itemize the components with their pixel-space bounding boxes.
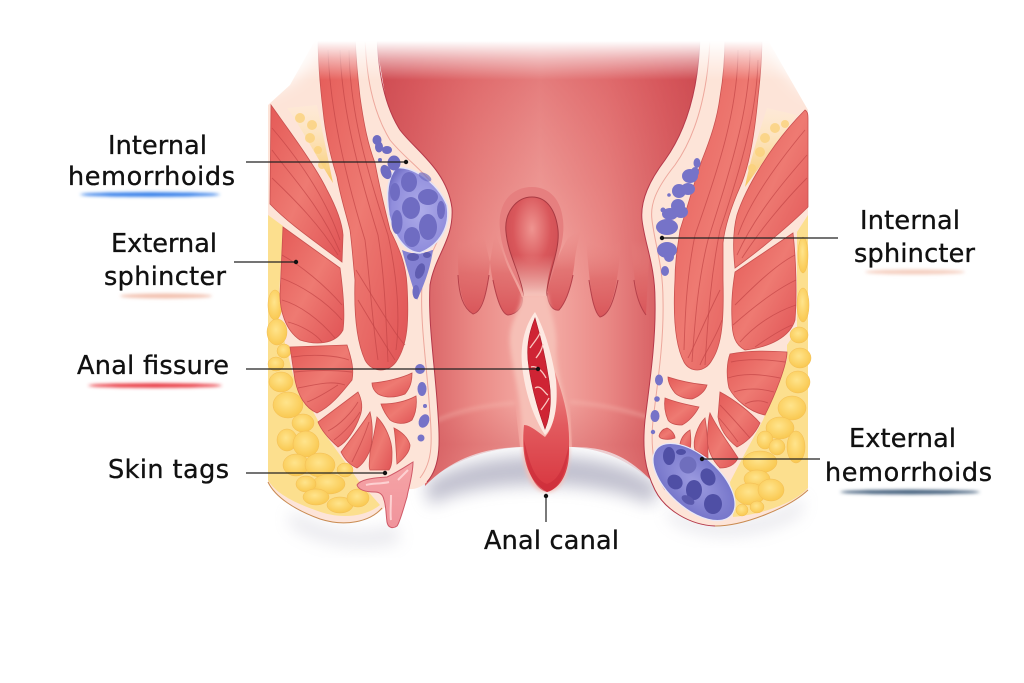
muscle: upper outer right [734,110,808,268]
muscle: fourth right [718,392,760,447]
muscle: sixth left [369,417,392,470]
label: internal hemorrhoids [68,131,408,197]
label: internal sphincter: Internal [860,206,960,236]
muscle: right long internal sphincter [674,35,762,370]
label: internal hemorrhoids: hemorrhoids [68,162,235,192]
label: internal sphincter: sphincter [854,239,976,269]
panel: left fat tissue [267,105,380,516]
label: external sphincter: sphincter [104,262,227,292]
anal fissure [522,312,557,435]
icon: internal hemorrhoid mass [372,135,448,300]
label: external sphincter [104,229,298,298]
icon: right internal vein blobs [650,158,700,434]
label: external hemorrhoids: External [849,424,956,454]
panel: rectal dome and opening [500,187,563,296]
panel: right labels [660,206,992,494]
muscle: seventh left [394,428,410,464]
muscle: small lower inner left [381,396,416,423]
label: internal hemorrhoids: Internal [108,131,207,161]
panel: left tissue body [268,35,452,523]
icon: left lower vein blobs [415,364,431,442]
label: external sphincter: External [111,229,217,259]
soft fade of the upper outer tissue [240,10,840,100]
muscle: fourth left [318,392,362,447]
muscle: seventh right [680,430,691,449]
label: anal canal [484,494,619,556]
muscle: upper outer left [270,105,343,262]
label: anal fissure [77,351,540,388]
label: skin tags: Skin tags [108,455,229,485]
muscle: third left [290,345,353,413]
muscle: left long internal sphincter [318,35,408,370]
icon: skin tag [357,462,413,528]
drop shadow under the anatomy [290,455,805,547]
muscle: second left [280,227,344,343]
panel: right external sphincter muscles [659,110,808,468]
muscle: fifth left [341,412,372,468]
icon: external hemorrhoid [639,429,749,535]
anal canal [510,294,569,492]
muscle: second right [732,233,796,350]
label: anal canal: Anal canal [484,526,619,556]
panel: left external sphincter muscles [270,105,416,470]
top fade [250,20,830,80]
label: external hemorrhoids [700,424,992,494]
panel: left labels [68,131,540,485]
muscle: third right [727,351,787,415]
muscle: small upper inner left [372,373,412,397]
panel: right tissue body [642,35,808,526]
label: internal sphincter [660,206,976,274]
panel: right fat tissue [730,108,811,517]
muscle: fifth right [707,413,738,468]
muscle: small upper inner right [668,377,707,399]
muscle: sixth right [694,418,708,458]
label: anal fissure: Anal fissure [77,351,229,381]
label: skin tags [108,455,387,485]
panel: central rectal wall [375,35,705,490]
muscle: blob right [659,428,675,439]
muscle: small lower inner right [665,398,699,425]
label: external hemorrhoids: hemorrhoids [825,458,992,488]
panel: mucosal folds [458,230,650,317]
